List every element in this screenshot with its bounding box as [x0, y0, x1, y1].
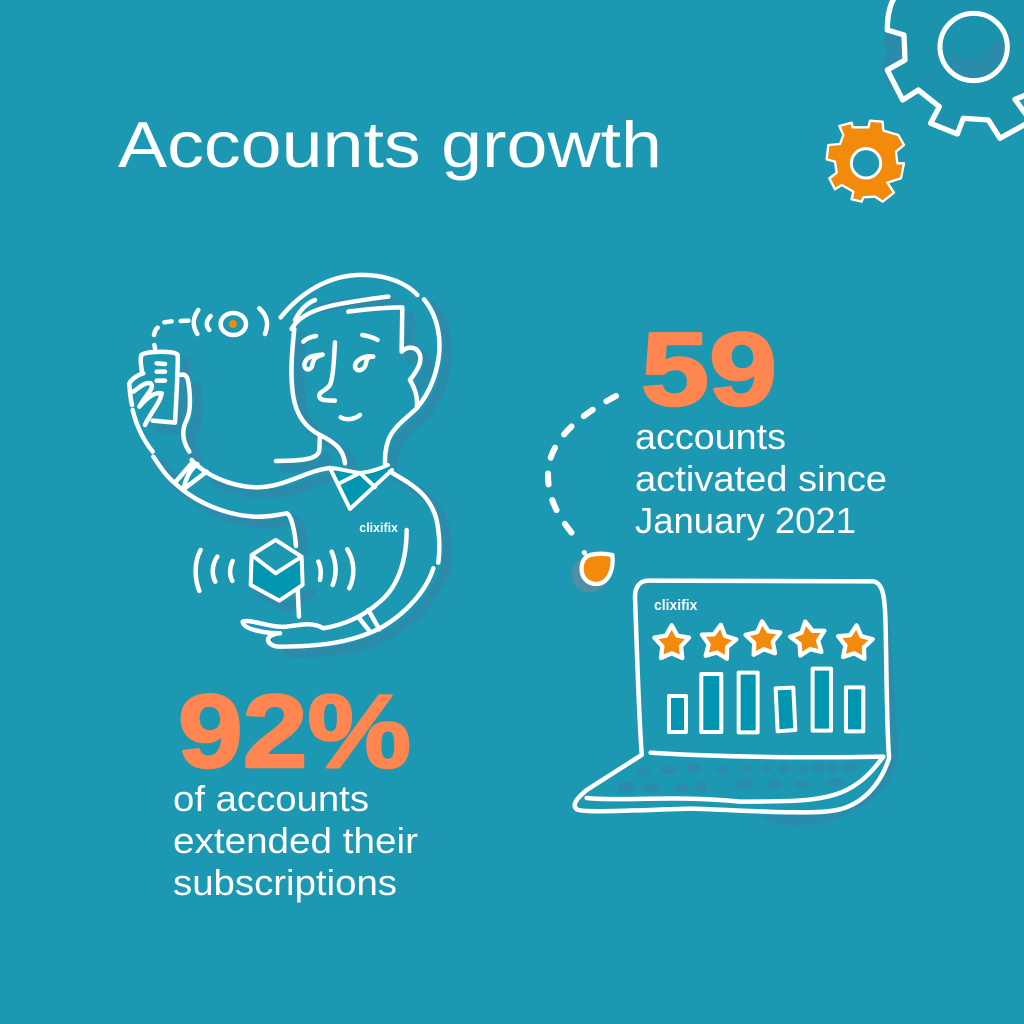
person shadow	[161, 301, 447, 653]
rating stars	[654, 619, 874, 660]
title: Accounts growth	[118, 108, 662, 181]
logo on screen: clixifix	[654, 598, 698, 614]
cube motion waves	[196, 549, 353, 591]
illustration: laptop	[575, 581, 898, 825]
text: 59 description	[635, 416, 887, 541]
icon: large gear	[882, 0, 1024, 138]
icon: cube	[251, 540, 303, 601]
head	[276, 275, 439, 464]
text: 92% description: subscriptions	[173, 862, 397, 903]
text: 59 description: accounts	[635, 416, 786, 457]
text: 92% description	[173, 778, 418, 903]
collar	[330, 465, 392, 509]
laptop shadow	[760, 607, 898, 825]
phone and hand	[129, 345, 190, 452]
text: 92% description: of accounts	[173, 778, 369, 819]
dashed arrow to pin	[548, 396, 616, 543]
icon: location pin	[572, 550, 613, 593]
signal waves and dot	[154, 308, 267, 335]
illustration: person with phone and cube	[129, 275, 447, 653]
stat: 59: 59	[641, 312, 777, 428]
logo on shirt: clixifix	[359, 520, 399, 535]
icon: small orange gear	[827, 121, 904, 202]
laptop outline	[575, 581, 889, 812]
text: 59 description: January 2021	[635, 500, 856, 541]
bar chart	[669, 669, 863, 732]
stat: 92%: 92%	[178, 674, 411, 790]
text: 92% description: extended their	[173, 820, 418, 861]
arm and body outline	[133, 410, 439, 647]
text: 59 description: activated since	[635, 458, 887, 499]
keyboard keys	[618, 762, 856, 793]
